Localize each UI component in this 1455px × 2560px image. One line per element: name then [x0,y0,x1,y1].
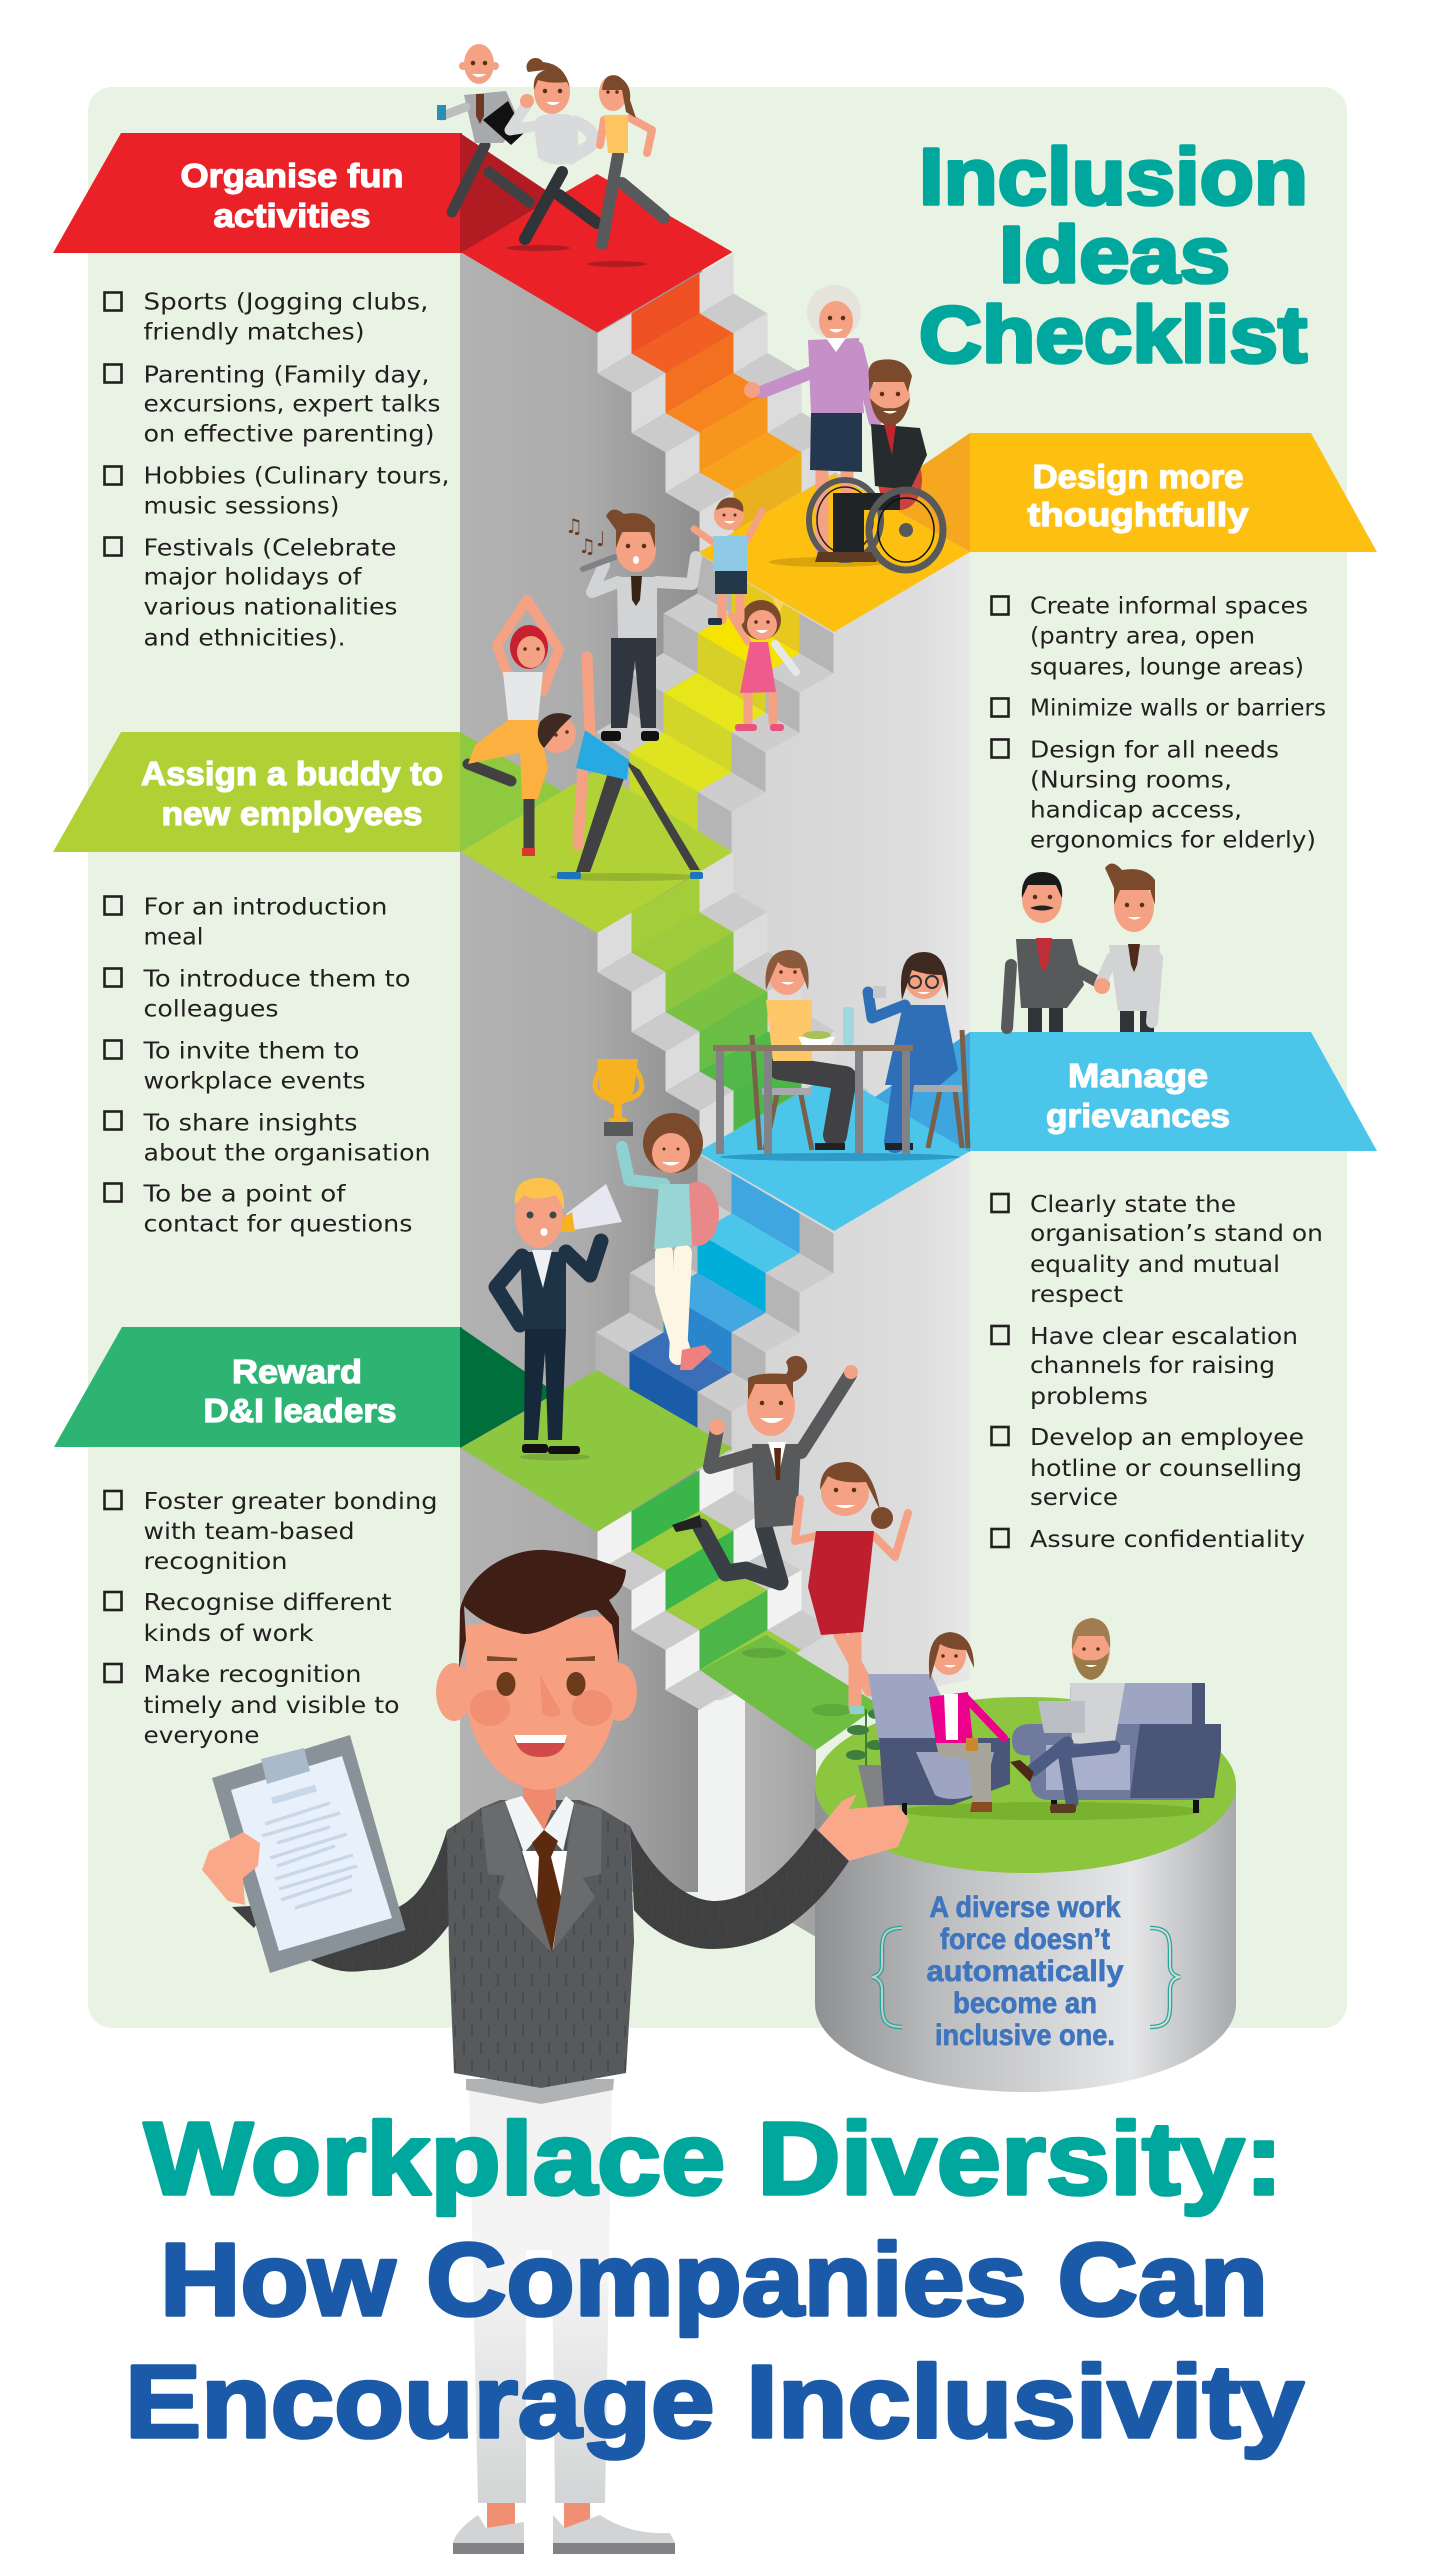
banner: manage grievances: grievances [1046,1097,1230,1134]
checklist: reward D&I leaders: with team-based [144,1519,354,1545]
checklist: organise fun activities: on effective parenting) [144,422,434,448]
checklist: manage grievances [992,1192,1323,1553]
checklist: manage grievances: respect [1030,1282,1123,1308]
cylinder quote: become an [953,1987,1097,2020]
figures: two women at table [713,950,968,1161]
figures: blond man with megaphone [496,1178,622,1460]
figures: stretching woman [538,657,703,881]
checklist: design more thoughtfully: (Nursing rooms, [1030,768,1232,794]
figures: singer with microphone: ♫ [565,514,583,538]
icon: trophy [595,1059,642,1136]
cylinder quote: A diverse work [930,1891,1121,1924]
checklist: reward D&I leaders: Make recognition [144,1662,362,1688]
banner: reward D&I leaders: D&I leaders [204,1392,396,1429]
checklist: reward D&I leaders: Recognise different [144,1590,392,1616]
sweater torso [447,1800,634,2088]
checklist: organise fun activities: Sports (Jogging clubs, [144,290,428,316]
checklist: design more thoughtfully [992,594,1326,854]
checklist: organise fun activities: and ethnicities). [144,626,346,652]
green landing [700,1635,880,1750]
checklist: reward D&I leaders: timely and visible to [144,1693,400,1719]
checklist: assign a buddy: To be a point of [142,1182,347,1208]
stair flight: lime to green [598,852,870,1170]
hand holding clipboard [202,1832,260,1905]
cylinder body [815,1785,1236,2092]
checklist: manage grievances: Assure confidentiality [1030,1527,1305,1553]
checklist: manage grievances: Have clear escalation [1030,1324,1298,1350]
cylinder quote: automatically [926,1955,1124,1988]
banner: assign a buddy: new employees [162,795,422,832]
cylinder quote: inclusive one. [935,2019,1115,2052]
figures: three runners [437,44,664,267]
checklist: reward D&I leaders: recognition [144,1549,288,1575]
main title: Encourage Inclusivity [125,2344,1304,2459]
checklist: organise fun activities: excursions, expert talks [144,392,440,418]
banner: assign a buddy [53,732,562,852]
banner: manage grievances [875,1032,1377,1152]
brace left [872,1928,902,2027]
checklist: manage grievances: Clearly state the [1030,1192,1236,1218]
stair flight: green to podium [598,1451,836,1710]
figures: jumping man [672,1356,858,1582]
checklist: organise fun activities: major holidays of [144,564,362,590]
armchair [868,1674,1010,1815]
heading: inclusion ideas checklist: Checklist [919,290,1307,379]
banner: reward D&I leaders [54,1327,556,1448]
figures: woman in red dress [795,1462,908,1714]
checklist: design more thoughtfully: (pantry area, open [1030,624,1255,650]
presenter figure [202,1550,909,2554]
banner: organise fun activities: activities [214,197,370,234]
checklist: reward D&I leaders: Foster greater bonding [144,1489,438,1515]
cylinder top [815,1697,1236,1873]
checklist: design more thoughtfully: squares, lounge areas) [1030,654,1304,680]
figures: handshake pair [1007,863,1160,1032]
checklist: organise fun activities: Parenting (Family day, [144,362,430,388]
trouser legs [466,2079,614,2503]
checklist: assign a buddy: workplace events [144,1068,366,1094]
platform: green [460,1370,732,1532]
clipboard [212,1735,406,1973]
wall: shaded left side [460,252,702,1892]
checklist: manage grievances: equality and mutual [1030,1252,1280,1278]
checklist: organise fun activities: friendly matches) [144,320,364,346]
main title: Workplace Diversity: [144,2101,1283,2216]
wall: light right side [700,552,970,1700]
right arm sleeve [630,1826,849,1949]
ankles and shoes [453,2503,675,2554]
figures: singer with microphone [565,509,696,741]
platform: red [460,174,732,332]
sofa [1012,1683,1221,1813]
figures: grandmother [744,285,875,550]
checklist: reward D&I leaders [104,1489,438,1749]
checklist: manage grievances: service [1030,1485,1118,1511]
shirt, collar, lapels and tie [481,1786,602,1953]
figures: man in wheelchair [769,359,943,570]
platform: blue [698,1073,970,1231]
white column [698,1690,745,1905]
banner: design more thoughtfully: thoughtfully [1028,496,1249,533]
banner: assign a buddy: Assign a buddy to [141,755,443,792]
seated woman [929,1632,1004,1812]
head and face [436,1550,637,1790]
checklist: manage grievances: Develop an employee [1030,1425,1304,1451]
figures: girl in pink [731,598,796,731]
left arm sleeve [232,1830,449,1972]
checklist: manage grievances: channels for raising [1030,1353,1275,1379]
checklist: assign a buddy: To introduce them to [142,966,410,992]
background panel [88,87,1347,2028]
stair flight: red to yellow [598,253,870,571]
figures: singer with microphone: ♩ [596,527,605,551]
figures: yoga woman [468,600,559,856]
banner: organise fun activities: Organise fun [180,157,404,194]
podium cylinder with seated pair [815,1618,1236,2092]
checklist: reward D&I leaders: everyone [144,1723,260,1749]
stair flight: yellow to lime [562,553,834,871]
checklist: assign a buddy: colleagues [144,996,278,1022]
checklist: assign a buddy: about the organisation [144,1140,430,1166]
banner: design more thoughtfully: Design more [1032,458,1244,495]
checklist: organise fun activities: Hobbies (Culinary tours, [144,464,450,490]
heading: inclusion ideas checklist [919,132,1308,379]
stair flight: blue [562,1153,834,1471]
platform: lime [460,770,732,933]
brace right [1150,1928,1180,2027]
heading: inclusion ideas checklist: Inclusion [919,132,1308,221]
checklist: organise fun activities: various nationalities [144,594,398,620]
checklist: organise fun activities: Festivals (Celebrate [144,536,396,562]
checklist: assign a buddy: To share insights [142,1110,358,1136]
checklist: organise fun activities: music sessions) [144,494,340,520]
checklist: reward D&I leaders: kinds of work [144,1621,314,1647]
checklist: assign a buddy: meal [144,924,204,950]
banner: manage grievances: Manage [1068,1057,1208,1094]
checklist: assign a buddy [104,894,430,1238]
grey column [745,1695,816,1937]
banner: design more thoughtfully [875,433,1377,552]
checklist: design more thoughtfully: Design for all needs [1030,738,1279,764]
checklist: manage grievances: hotline or counselling [1030,1456,1302,1482]
plant in pot [846,1709,898,1808]
pointing hand [818,1794,909,1861]
cylinder quote [926,1891,1124,2052]
checklist: design more thoughtfully: handicap access, [1030,798,1242,824]
checklist: manage grievances: problems [1030,1384,1148,1410]
figures: singer with microphone: ♫ [578,534,596,558]
checklist: design more thoughtfully: Create informal spaces [1030,594,1308,620]
checklist: manage grievances: organisation’s stand on [1030,1221,1323,1247]
checklist: design more thoughtfully: ergonomics for elderly) [1030,828,1316,854]
figures: boy in blue shirt [694,498,762,625]
figures: woman lifting trophy [622,1113,719,1370]
platform: yellow [698,474,970,632]
checklist: assign a buddy: For an introduction [144,894,388,920]
staircase tower [460,174,970,1937]
banner: reward D&I leaders: Reward [232,1353,362,1390]
seated man with laptop [1010,1618,1125,1813]
checklist: design more thoughtfully: Minimize walls or barriers [1030,696,1326,722]
checklist: assign a buddy: To invite them to [142,1038,360,1064]
cylinder quote: force doesn’t [940,1923,1110,1956]
banner: organise fun activities [53,133,556,253]
checklist: organise fun activities [104,290,450,652]
checklist: assign a buddy: contact for questions [144,1212,412,1238]
main title: How Companies Can [160,2222,1268,2337]
main title [125,2101,1304,2459]
heading: inclusion ideas checklist: Ideas [999,210,1230,299]
